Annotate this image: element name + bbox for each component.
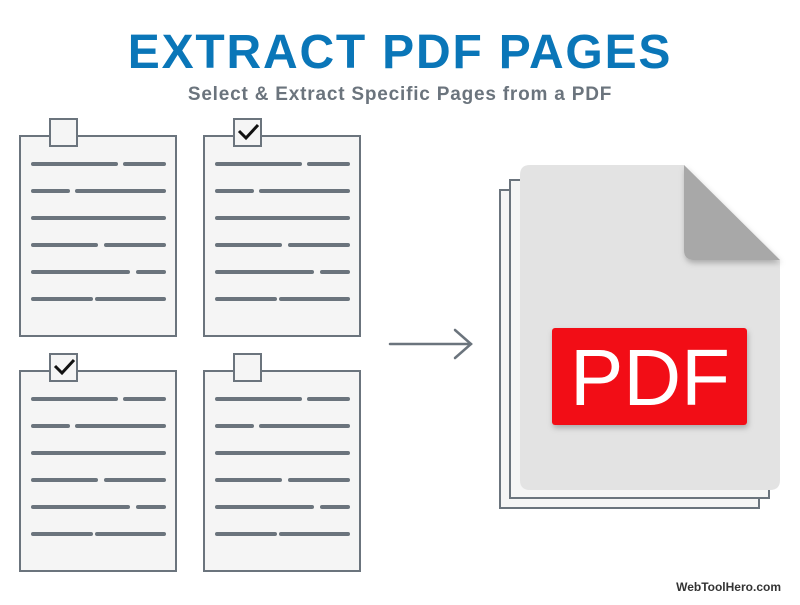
page: top left unchecked xyxy=(20,119,176,336)
arrow xyxy=(390,330,471,358)
page: bottom right unchecked xyxy=(204,354,360,571)
title: EXTRACT PDF PAGES xyxy=(128,26,672,79)
icon: pdf file stack xyxy=(500,160,800,508)
page: top right checked xyxy=(204,119,360,336)
subtitle: Select & Extract Specific Pages from a PDF xyxy=(188,84,612,105)
footer credit: WebToolHero.com xyxy=(676,580,781,594)
page: bottom left checked xyxy=(20,354,176,571)
pdf label: PDF xyxy=(570,333,730,422)
